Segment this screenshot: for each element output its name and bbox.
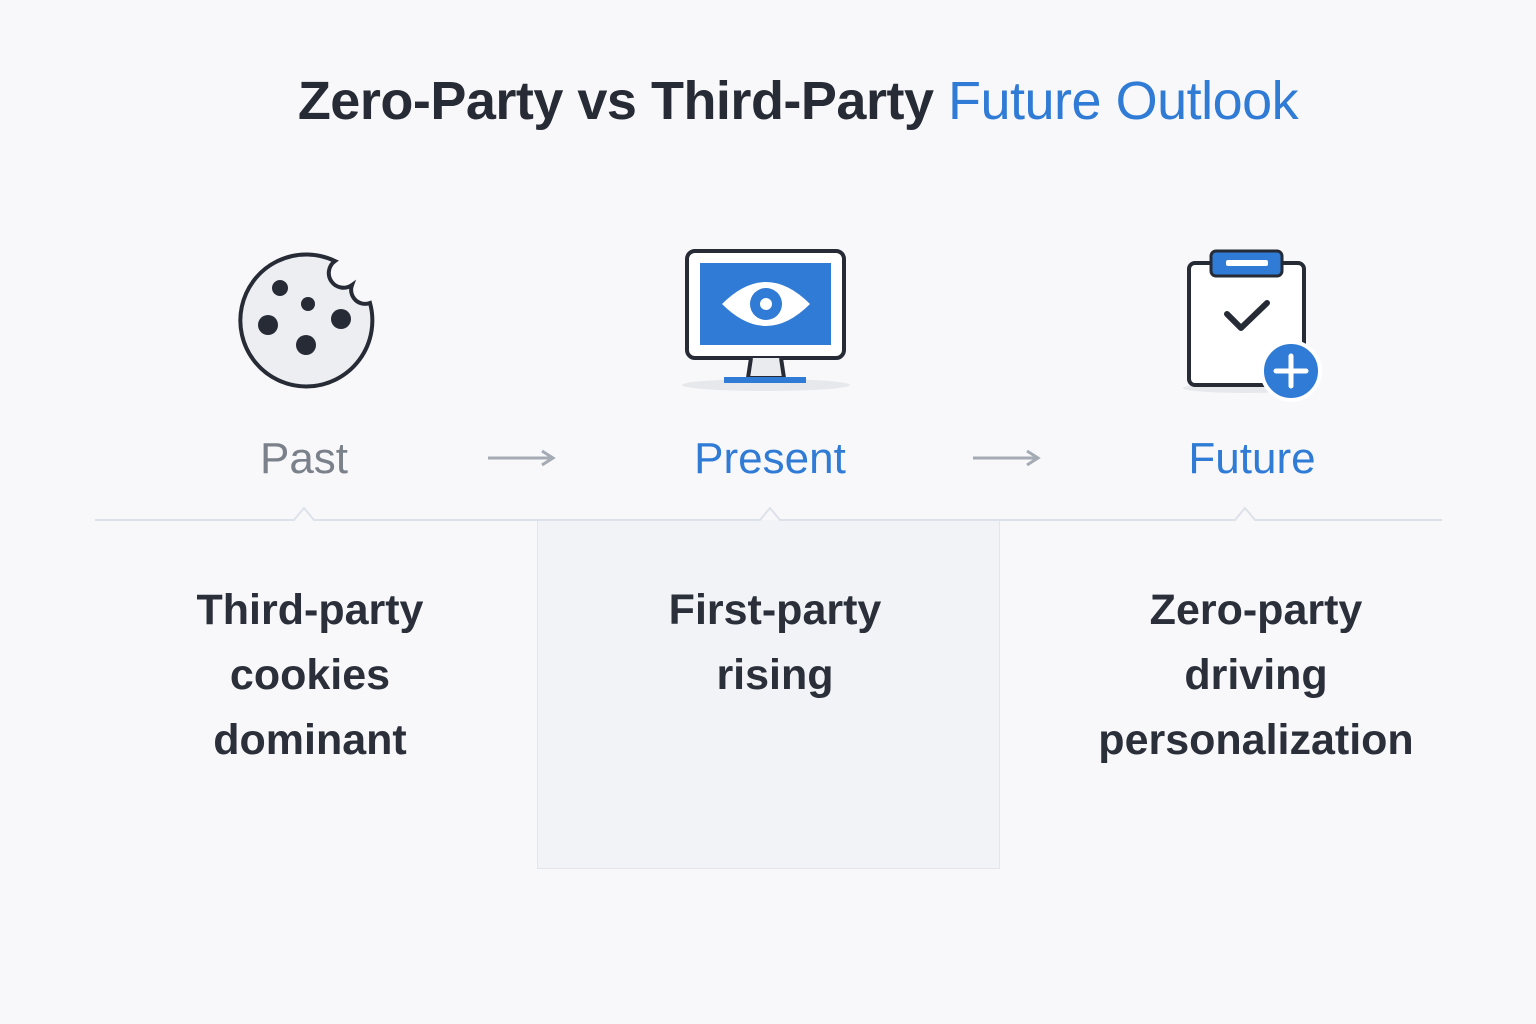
text: past	[197, 586, 424, 764]
text: present: First-party	[669, 586, 881, 634]
text: present: rising	[716, 651, 834, 699]
text: past: dominant	[213, 716, 407, 764]
text: future: Zero-party	[1150, 586, 1362, 634]
text: future: driving	[1184, 651, 1328, 699]
icon: monitor with eye	[682, 249, 850, 391]
arrow 2	[973, 450, 1041, 466]
text: present	[669, 586, 881, 699]
text: future: personalization	[1098, 716, 1414, 764]
text: past: Third-party	[197, 586, 423, 634]
text: future	[1098, 586, 1414, 764]
icon: cookie	[238, 252, 374, 388]
text: past: cookies	[230, 651, 390, 699]
label: Past: Past	[260, 434, 348, 483]
title: Zero-Party vs Third-Party Future Outlook	[298, 71, 1298, 131]
icon: clipboard with plus	[1183, 250, 1318, 398]
label: Future: Future	[1188, 434, 1316, 483]
present highlight box	[537, 520, 1000, 869]
label: Present: Present	[694, 434, 846, 483]
arrow 1	[488, 450, 556, 466]
